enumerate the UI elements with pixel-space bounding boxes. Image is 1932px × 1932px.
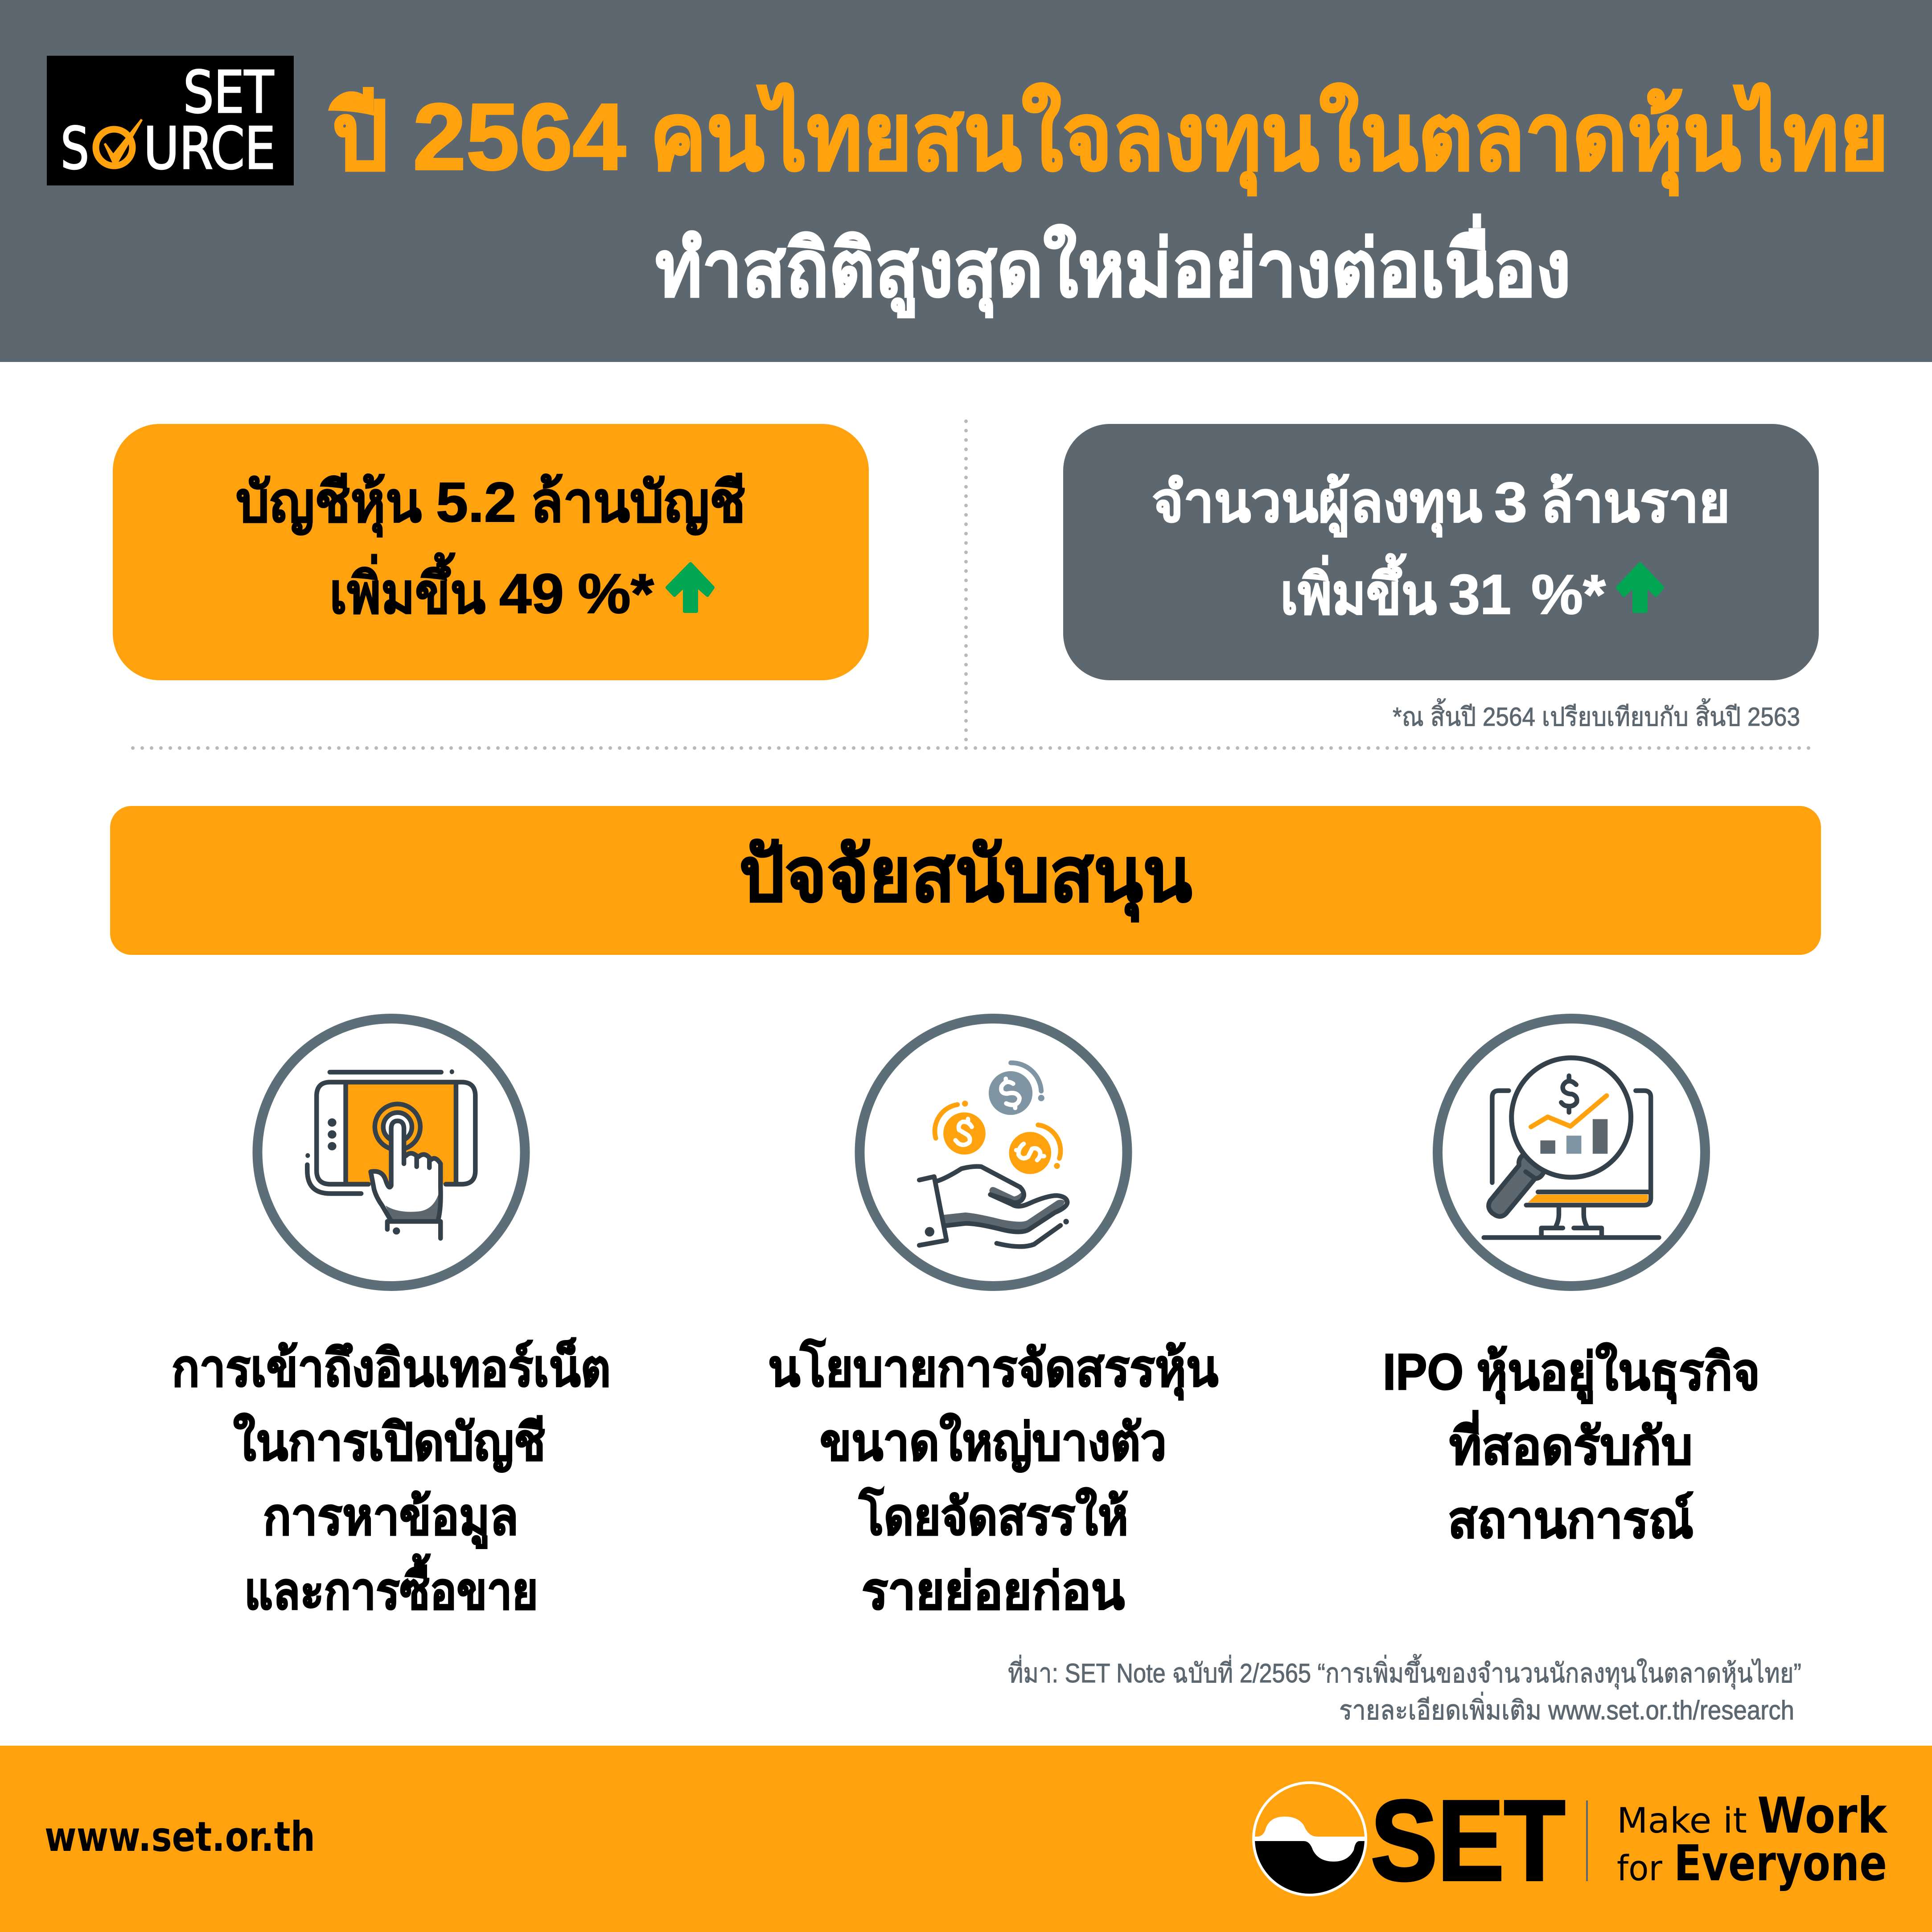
- SET Source logo: S: [61, 115, 89, 182]
- text block: allocation policy: [768, 1339, 1218, 1620]
- stat panel: accounts: 49: [499, 562, 564, 625]
- icon: green up arrow: [1618, 564, 1662, 611]
- source note: รายละเอียดเพิ่มเติม www.set.or.th/research: [1339, 1692, 1794, 1725]
- stat panel: investors: ล้านราย: [1541, 471, 1730, 534]
- SET logo: SET: [1371, 1777, 1565, 1904]
- section banner: [110, 806, 1821, 955]
- stat panel: accounts: %*: [578, 562, 654, 625]
- stat panel: investors: [1063, 424, 1819, 680]
- website: www.set.or.th: [45, 1813, 315, 1861]
- text block: internet access: [172, 1337, 611, 1620]
- SET Source logo: SET: [183, 58, 274, 126]
- text block: allocation policy: ขนาดใหญ่บางตัว: [820, 1413, 1167, 1473]
- source note: [1008, 1654, 1801, 1725]
- text block: allocation policy: นโยบายการจัดสรรหุ้น: [768, 1339, 1218, 1400]
- stat panel: accounts: [113, 424, 869, 680]
- tagline: Make it: [1617, 1801, 1747, 1841]
- stat panel: investors: 31: [1449, 563, 1511, 626]
- title: ปี: [329, 84, 388, 189]
- tagline: Work: [1757, 1787, 1888, 1845]
- text block: IPO: IPO หุ้นอยู่ในธุรกิจ: [1383, 1343, 1760, 1404]
- text block: allocation policy: โดยจัดสรรให้: [859, 1487, 1128, 1546]
- footnote: *ณ สิ้นปี 2564 เปรียบเทียบกับ สิ้นปี 2563: [1393, 699, 1800, 732]
- icon: magnifier and monitor: [1438, 1019, 1705, 1286]
- text block: IPO: ที่สอดรับกับ: [1449, 1410, 1693, 1475]
- title: 2564: [413, 84, 626, 189]
- footer band: [0, 1746, 1932, 1932]
- text block: internet access: และการซื้อขาย: [244, 1554, 538, 1620]
- section banner: ปัจจัยสนับสนุน: [739, 833, 1192, 922]
- stat panel: accounts: เพิ่มขึ้น: [329, 552, 485, 625]
- text block: allocation policy: รายย่อยก่อน: [862, 1563, 1125, 1620]
- source note: ที่มา: SET Note ฉบับที่ 2/2565 “การเพิ่มขึ้นของจำนวนนักลงทุนในตลาดหุ้นไทย”: [1008, 1654, 1801, 1689]
- tagline: for: [1617, 1849, 1663, 1889]
- header band: [0, 0, 1932, 362]
- stat panel: investors: %*: [1531, 563, 1606, 626]
- icon: coins over hand: [859, 1019, 1127, 1286]
- text block: internet access: การหาข้อมูล: [263, 1488, 518, 1549]
- icon: touch screen: [258, 1019, 525, 1286]
- stat panel: investors: จำนวนผู้ลงทุน: [1152, 471, 1482, 537]
- SET logo: [1252, 1781, 1566, 1896]
- tagline: Everyone: [1674, 1835, 1887, 1892]
- stat panel: accounts: 5.2: [436, 471, 516, 534]
- tagline: [1617, 1787, 1888, 1892]
- SET Source logo: [47, 56, 294, 185]
- stat panel: accounts: บัญชีหุ้น: [236, 471, 422, 537]
- subtitle: ทำสถิติสูงสุดใหม่อย่างต่อเนื่อง: [655, 214, 1571, 318]
- stat panel: investors: เพิ่มขึ้น: [1280, 553, 1437, 626]
- stat panel: investors: 3: [1494, 471, 1527, 534]
- SET Source logo: URCE: [144, 115, 275, 182]
- text block: IPO: [1383, 1343, 1760, 1549]
- text block: IPO: สถานการณ์: [1448, 1492, 1694, 1549]
- text block: internet access: ในการเปิดบัญชี: [233, 1413, 546, 1473]
- text block: internet access: การเข้าถึงอินเทอร์เน็ต: [172, 1337, 611, 1397]
- stat panel: accounts: ล้านบัญชี: [530, 471, 746, 535]
- icon: green up arrow: [667, 564, 713, 611]
